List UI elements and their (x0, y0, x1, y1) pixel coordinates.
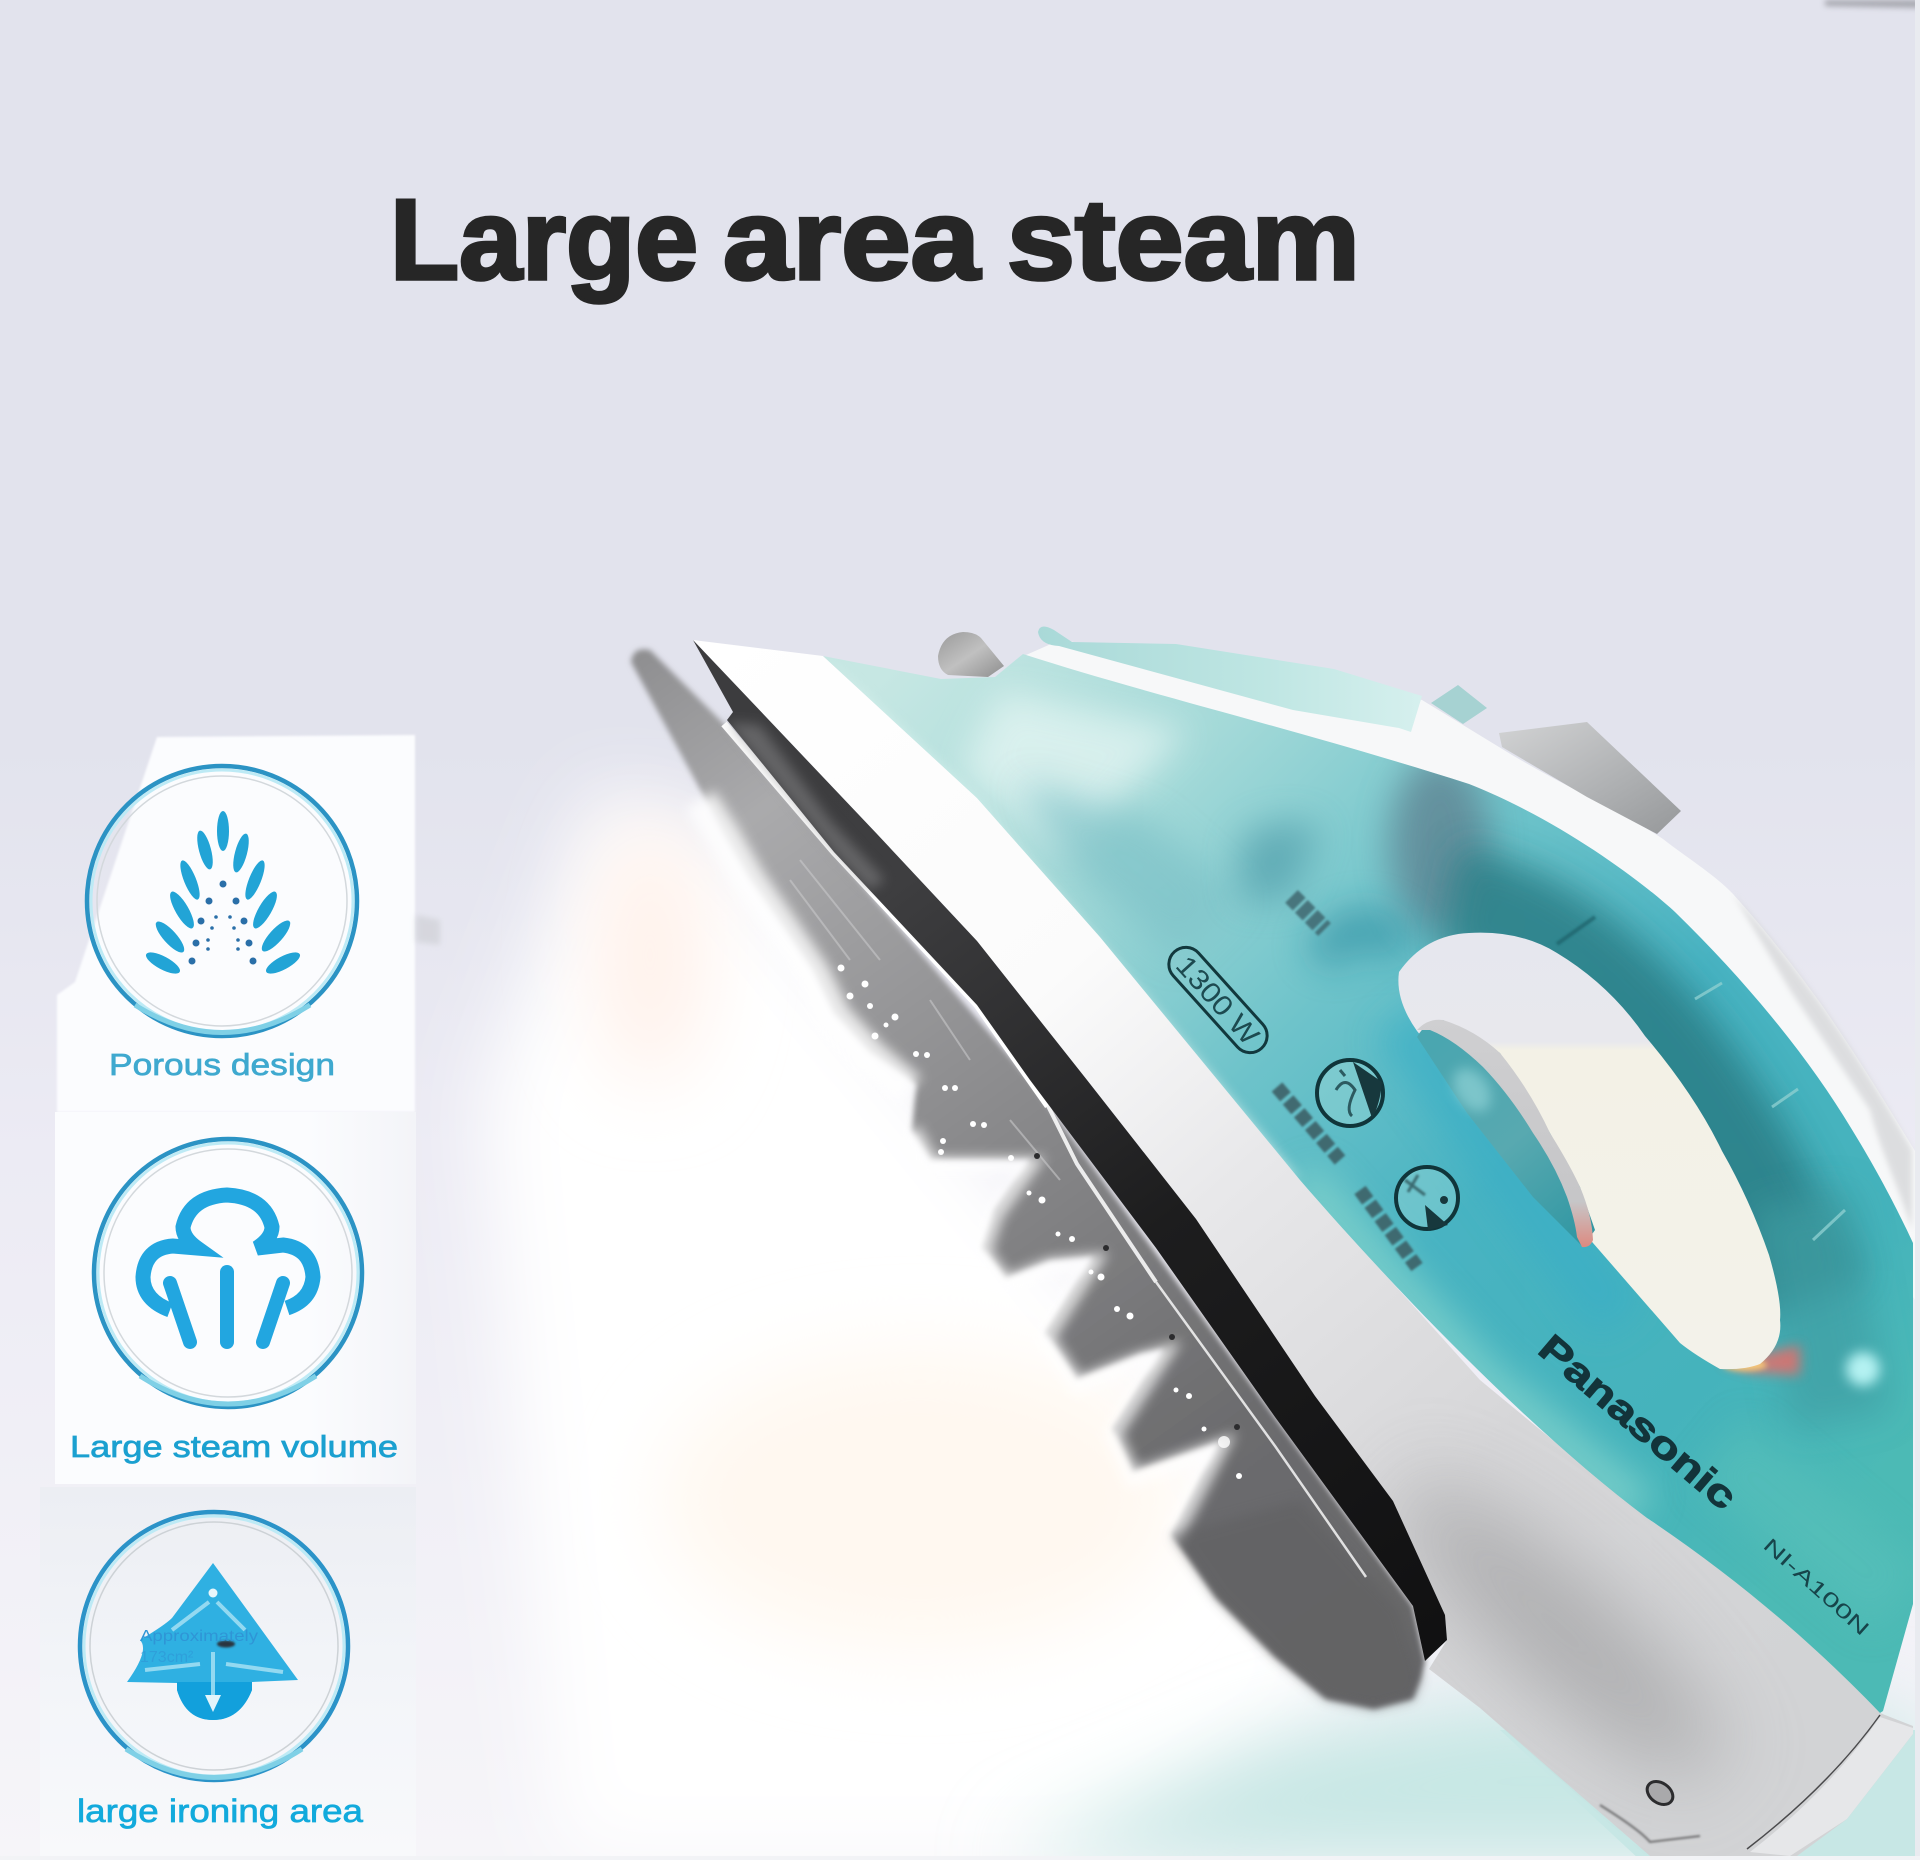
right band shading (1733, 894, 1912, 1230)
small area note (140, 1628, 258, 1666)
brand name: Panasonic (1530, 1327, 1744, 1519)
base shading (1367, 1449, 1913, 1856)
panel: large ironing area (40, 1487, 416, 1856)
label: large ironing area (77, 1793, 363, 1829)
top white band (1026, 640, 1915, 1300)
title (390, 177, 1360, 304)
power socket mark (1600, 1777, 1700, 1842)
title: area (723, 177, 982, 304)
symbol: anti-drip circle (1317, 1060, 1383, 1126)
soleplate white stripe (724, 724, 1366, 1577)
panel: large steam volume (55, 1112, 416, 1484)
white iron base (693, 640, 1913, 1856)
symbol: self clean circle (1396, 1167, 1458, 1230)
panel: porous design (57, 735, 440, 1112)
printed mark: steam label (1291, 894, 1325, 932)
teal tab (1431, 685, 1487, 724)
grey knob (938, 632, 1004, 677)
icon: soleplate arrow (127, 1563, 298, 1720)
icon ring (87, 766, 357, 1036)
printed marks beside symbols (1277, 1087, 1340, 1160)
handle ticks (1695, 983, 1845, 1240)
black seal band (693, 640, 1447, 1661)
label: Large steam volume (70, 1429, 398, 1464)
soleplate with steam-eroded edge (631, 649, 1425, 1709)
title: steam (1007, 177, 1360, 304)
glow (1846, 1352, 1880, 1386)
mid-band highlight (727, 722, 885, 890)
small area note: Approximately (140, 1628, 258, 1645)
icon ring (80, 1512, 348, 1780)
label: Porous design (109, 1047, 335, 1082)
printed marks beside self clean (1360, 1190, 1417, 1267)
teal body (823, 654, 1913, 1713)
mint top cover (1038, 626, 1422, 732)
icon: porous spray (143, 811, 303, 978)
teal reflections (904, 684, 1886, 1519)
icon: steam cloud (143, 1195, 313, 1342)
wattage capsule (1162, 940, 1274, 1060)
handle opening (1398, 933, 1780, 1369)
small area note: 173cm² (140, 1649, 194, 1666)
steam holes (838, 964, 1242, 1479)
grey button (1499, 722, 1681, 834)
title: Large (390, 177, 698, 304)
icon ring (94, 1139, 362, 1407)
temperature dial (1417, 1020, 1595, 1247)
wattage capsule: 1300 W (1170, 950, 1266, 1051)
model number: NI-A100N (1759, 1534, 1873, 1640)
illustration: steam iron (631, 626, 1915, 1856)
